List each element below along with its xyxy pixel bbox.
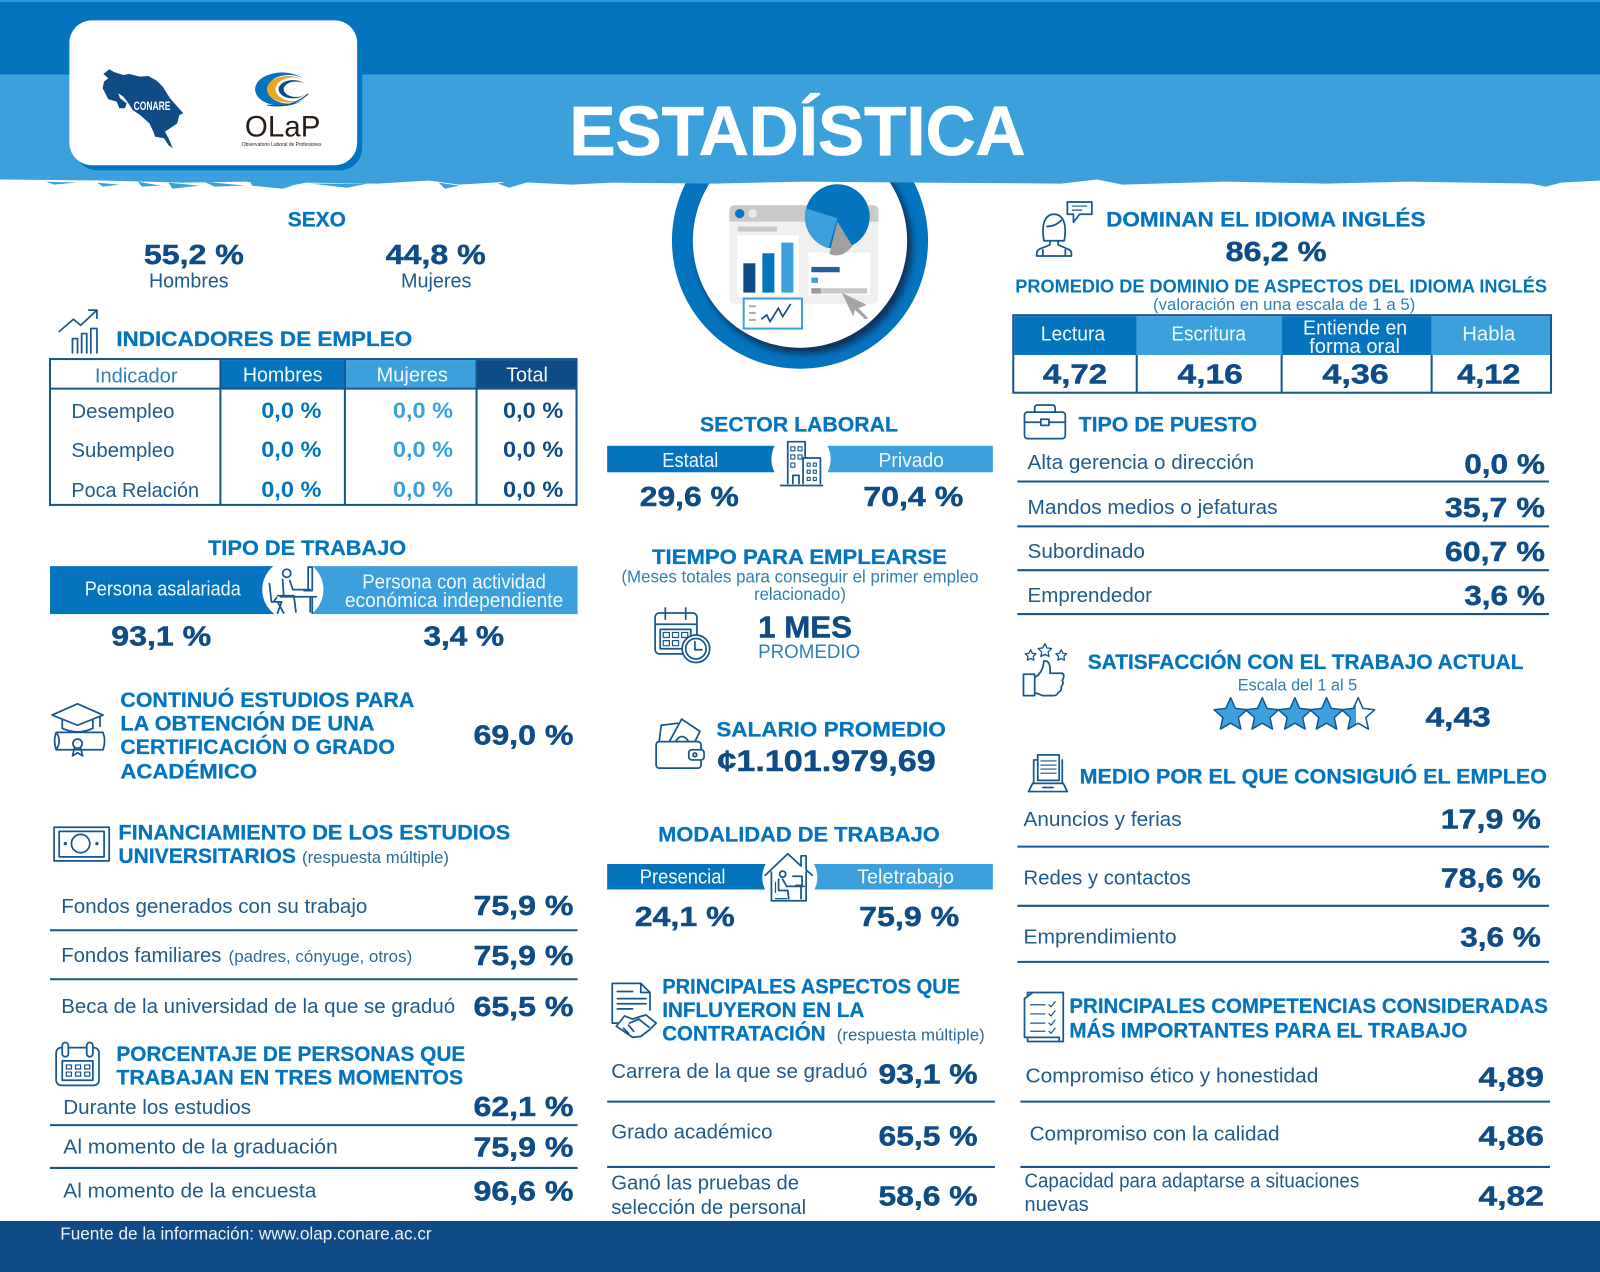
icon: thumbs up with stars <box>1023 644 1067 696</box>
panel: sector laboral <box>607 412 993 512</box>
row: emprendimiento: Emprendimiento <box>1023 927 1177 949</box>
heading: promedio de dominio: PROMEDIO DE DOMINIO DE ASPECTOS DEL IDIOMA INGLÉS <box>1015 276 1547 297</box>
row: grado académico: Grado académico <box>611 1121 772 1143</box>
heading: satisfacción: SATISFACCIÓN CON EL TRABAJO ACTUAL <box>1088 649 1523 674</box>
central illustration: dashboard in circle <box>672 113 928 369</box>
stat: mujeres <box>386 239 486 293</box>
icon: checklist <box>1024 993 1063 1041</box>
note: escala: (valoración en una escala de 1 a 5) <box>1153 296 1415 314</box>
table: indicadores: 0,0 % <box>261 398 321 423</box>
row: anuncios: 17,9 % <box>1441 803 1541 834</box>
table: indicadores: Mujeres <box>377 365 448 386</box>
row: graduación: 75,9 % <box>473 1132 573 1163</box>
bar: presencial y teletrabajo <box>607 850 993 905</box>
header band <box>0 0 1600 189</box>
footer <box>0 1221 1600 1272</box>
icon: home office <box>765 854 812 901</box>
row: compromiso ético: Compromiso ético y honestidad <box>1026 1065 1318 1087</box>
row: carrera <box>607 1058 995 1102</box>
stat: hombres: Hombres <box>149 271 229 293</box>
note: meses totales: relacionado) <box>754 584 846 604</box>
icon: rising chart <box>59 310 97 353</box>
row: subordinado: 60,7 % <box>1445 536 1545 567</box>
heading: tres momentos: TRABAJAN EN TRES MOMENTOS <box>116 1065 463 1089</box>
row: mandos medios: 35,7 % <box>1445 492 1545 523</box>
heading: aspectos de contratación: INFLUYERON EN LA <box>662 998 864 1022</box>
stat: dominan inglés: 86,2 % <box>1226 236 1327 267</box>
logo: CONARE map <box>103 69 183 148</box>
heading: continuó estudios: CERTIFICACIÓN O GRADO <box>120 734 395 759</box>
row: capacidad de adaptarse: nuevas <box>1024 1194 1089 1216</box>
panel: modalidad de trabajo <box>607 823 993 932</box>
heading: aspectos de contratación: (respuesta múltiple) <box>837 1026 985 1044</box>
bar: presencial y teletrabajo: Teletrabajo <box>857 866 954 888</box>
icon: briefcase <box>1024 405 1065 439</box>
row: beca: Beca de la universidad de la que se graduó <box>61 996 455 1018</box>
row: fondos familiares: Fondos familiares <box>61 945 221 967</box>
row: pruebas de selección: selección de personal <box>611 1197 806 1219</box>
panel: continuó estudios <box>52 687 573 783</box>
logo card <box>69 20 362 170</box>
row: capacidad de adaptarse: 4,82 <box>1479 1181 1544 1212</box>
logo: OLaP <box>242 72 322 148</box>
panel: financiamiento <box>50 821 578 1022</box>
row: fondos de trabajo: 75,9 % <box>473 890 573 921</box>
row: capacidad de adaptarse <box>1024 1170 1544 1216</box>
panel: tiempo para emplearse <box>621 545 979 663</box>
bar: estatal y privado <box>607 429 993 489</box>
table: indicadores: Hombres <box>243 365 322 386</box>
heading: sector laboral: SECTOR LABORAL <box>700 412 898 436</box>
heading: tres momentos <box>116 1042 465 1089</box>
heading: financiamiento <box>118 821 510 868</box>
row: compromiso calidad: Compromiso con la calidad <box>1030 1123 1280 1145</box>
row: carrera: 93,1 % <box>879 1058 978 1089</box>
note: meses totales: (Meses totales para conseguir el primer empleo <box>621 566 979 586</box>
panel: indicadores de empleo <box>50 310 577 505</box>
row: grado académico <box>607 1121 995 1167</box>
logo: CONARE map: CONARE <box>134 99 170 113</box>
heading: tres momentos: PORCENTAJE DE PERSONAS QUE <box>116 1042 465 1066</box>
stat: hombres: 55,2 % <box>144 239 244 270</box>
panel: satisfacción <box>1023 644 1523 732</box>
table: dominio de inglés: 4,12 <box>1457 359 1520 390</box>
icon: calendar <box>56 1042 99 1085</box>
row: emprendedor: Emprendedor <box>1028 585 1152 607</box>
table: indicadores: 0,0 % <box>261 437 321 462</box>
row: capacidad de adaptarse: Capacidad para adaptarse a situaciones <box>1024 1170 1359 1192</box>
table: indicadores: 0,0 % <box>393 477 453 502</box>
row: durante los estudios: 62,1 % <box>473 1091 573 1122</box>
heading: indicadores de empleo: INDICADORES DE EMPLEO <box>116 327 412 351</box>
table: dominio de inglés: 4,72 <box>1043 359 1107 390</box>
stat: 1 mes: 1 MES <box>758 611 852 645</box>
row: fondos de trabajo: Fondos generados con su trabajo <box>61 896 367 918</box>
heading: financiamiento: (respuesta múltiple) <box>302 849 449 867</box>
row: beca <box>61 991 573 1022</box>
heading: tipo de puesto: TIPO DE PUESTO <box>1079 412 1257 436</box>
row: mandos medios <box>1017 492 1549 526</box>
row: compromiso ético <box>1020 1061 1550 1102</box>
stat: teletrabajo: 75,9 % <box>859 901 959 932</box>
table: dominio de inglés: 4,36 <box>1322 359 1389 390</box>
table: dominio de inglés: 4,16 <box>1178 359 1243 390</box>
bar: estatal y privado: Estatal <box>662 450 718 472</box>
heading: financiamiento: FINANCIAMIENTO DE LOS ESTUDIOS <box>118 821 510 844</box>
panel: competencias <box>1020 993 1550 1216</box>
logo: OLaP: Observatorio Laboral de Profesiones <box>242 142 322 148</box>
heading: tipo de trabajo: TIPO DE TRABAJO <box>208 536 406 560</box>
row: emprendimiento <box>1017 922 1549 962</box>
footer: Fuente de la información: www.olap.conare.ac.cr <box>60 1223 432 1243</box>
table: indicadores: Subempleo <box>71 440 174 462</box>
row: graduación: Al momento de la graduación <box>63 1137 338 1159</box>
heading: competencias <box>1069 994 1548 1042</box>
row: pruebas de selección: Ganó las pruebas de <box>611 1172 799 1194</box>
title: ESTADÍSTICA <box>569 92 1026 170</box>
table: dominio de inglés <box>1013 315 1551 393</box>
row: fondos de trabajo <box>50 890 578 930</box>
row: emprendimiento: 3,6 % <box>1460 922 1541 953</box>
row: encuesta <box>63 1176 573 1207</box>
heading: competencias: MÁS IMPORTANTES PARA EL TRABAJO <box>1069 1017 1467 1042</box>
table: indicadores: 0,0 % <box>503 437 563 462</box>
stat: 1 mes <box>758 611 860 663</box>
table: indicadores: Indicador <box>95 366 178 388</box>
panel: tipo de puesto <box>1017 405 1549 614</box>
panel: idioma inglés <box>1013 202 1551 393</box>
stat: presencial: 24,1 % <box>635 901 735 932</box>
row: durante los estudios: Durante los estudios <box>63 1097 251 1119</box>
row: alta gerencia: 0,0 % <box>1464 448 1545 479</box>
table: indicadores: 0,0 % <box>503 477 563 502</box>
table: dominio de inglés: forma oral <box>1309 336 1400 358</box>
heading: continuó estudios <box>120 687 414 783</box>
icon: person at desk <box>269 567 316 613</box>
bar: asalariada e independiente: económica independiente <box>345 590 563 612</box>
table: indicadores: Total <box>506 365 548 386</box>
heading: salario promedio: SALARIO PROMEDIO <box>716 717 946 741</box>
row: compromiso calidad <box>1020 1121 1550 1167</box>
table: indicadores: Desempleo <box>71 401 174 423</box>
bar: estatal y privado: Privado <box>879 450 944 472</box>
row: grado académico: 65,5 % <box>879 1121 978 1152</box>
stat: independiente: 3,4 % <box>423 621 504 652</box>
stat: satisfacción: 4,43 <box>1426 701 1491 732</box>
row: fondos familiares: 75,9 % <box>473 940 573 971</box>
table: dominio de inglés: Escritura <box>1171 324 1247 346</box>
heading: sexo: SEXO <box>288 207 346 231</box>
icon: laptop with document <box>1029 755 1067 792</box>
heading: aspectos de contratación <box>662 975 985 1045</box>
bar: presencial y teletrabajo: Presencial <box>640 866 726 888</box>
row: beca: 65,5 % <box>473 991 573 1022</box>
bar: asalariada e independiente <box>50 559 578 620</box>
heading: continuó estudios: LA OBTENCIÓN DE UNA <box>120 710 374 735</box>
row: subordinado <box>1017 536 1549 570</box>
stat: 1 mes: PROMEDIO <box>758 641 860 663</box>
panel: tipo de trabajo <box>50 536 578 652</box>
row: encuesta: Al momento de la encuesta <box>63 1181 317 1203</box>
row: pruebas de selección: 58,6 % <box>879 1181 978 1212</box>
table: dominio de inglés: Lectura <box>1041 324 1106 346</box>
heading: dominan inglés: DOMINAN EL IDIOMA INGLÉS <box>1106 206 1426 231</box>
heading: aspectos de contratación: PRINCIPALES ASPECTOS QUE <box>662 975 960 999</box>
row: compromiso calidad: 4,86 <box>1479 1121 1544 1152</box>
row: encuesta: 96,6 % <box>473 1176 573 1207</box>
icon: buildings <box>781 442 822 486</box>
panel: sexo <box>144 207 486 293</box>
row: redes: 78,6 % <box>1441 862 1541 893</box>
icon: graduation cap and diploma <box>52 704 105 756</box>
table: indicadores: 0,0 % <box>503 398 563 423</box>
stat: hombres <box>144 239 244 293</box>
heading: medio de empleo: MEDIO POR EL QUE CONSIGUIÓ EL EMPLEO <box>1080 763 1547 788</box>
heading: continuó estudios: ACADÉMICO <box>120 758 257 783</box>
row: emprendedor: 3,6 % <box>1464 580 1545 611</box>
panel: salario promedio <box>656 717 946 778</box>
note: meses totales <box>621 566 979 604</box>
stat: salario: ¢1.101.979,69 <box>717 745 936 778</box>
rating stars <box>1214 698 1375 729</box>
row: fondos familiares: (padres, cónyuge, otros) <box>229 948 412 966</box>
icon: woman speaking <box>1037 202 1092 256</box>
heading: continuó estudios: CONTINUÓ ESTUDIOS PARA <box>120 687 414 712</box>
table: indicadores: 0,0 % <box>261 477 321 502</box>
table: indicadores: 0,0 % <box>393 398 453 423</box>
bar: asalariada e independiente: Persona asalariada <box>85 579 241 601</box>
row: redes: Redes y contactos <box>1023 867 1191 889</box>
heading: tiempo para emplearse: TIEMPO PARA EMPLEARSE <box>652 545 947 569</box>
row: graduación <box>50 1132 578 1168</box>
row: carrera: Carrera de la que se graduó <box>611 1061 867 1083</box>
icon: contract and handshake <box>612 983 656 1037</box>
panel: aspectos de contratación <box>607 975 995 1219</box>
heading: financiamiento: UNIVERSITARIOS <box>118 844 296 868</box>
stat: estatal: 29,6 % <box>640 481 739 512</box>
table: dominio de inglés: Entiende en <box>1303 318 1407 340</box>
logo: OLaP: OLaP <box>245 111 320 144</box>
icon: wallet <box>656 719 704 768</box>
row: mandos medios: Mandos medios o jefaturas <box>1028 497 1278 519</box>
panel: tres momentos <box>50 1042 578 1207</box>
icon: calendar and clock <box>655 608 710 663</box>
row: alta gerencia <box>1017 448 1549 481</box>
row: redes <box>1017 862 1549 906</box>
stat: continuó estudios: 69,0 % <box>473 720 573 751</box>
row: durante los estudios <box>50 1091 578 1125</box>
note: escala del 1 al 5: Escala del 1 al 5 <box>1238 677 1357 695</box>
stat: mujeres: 44,8 % <box>386 239 486 270</box>
table: indicadores <box>50 359 577 505</box>
table: dominio de inglés: Habla <box>1462 324 1516 346</box>
panel: medio de empleo <box>1017 755 1549 962</box>
table: indicadores: 0,0 % <box>393 437 453 462</box>
row: anuncios: Anuncios y ferias <box>1023 809 1182 831</box>
row: compromiso ético: 4,89 <box>1479 1061 1544 1092</box>
heading: modalidad de trabajo: MODALIDAD DE TRABAJO <box>658 823 940 847</box>
row: anuncios <box>1017 803 1549 847</box>
stat: asalariada: 93,1 % <box>111 621 211 652</box>
row: pruebas de selección <box>611 1172 978 1219</box>
table: indicadores: Poca Relación <box>71 480 199 502</box>
row: alta gerencia: Alta gerencia o dirección <box>1028 452 1254 474</box>
bar: asalariada e independiente: Persona con actividad <box>362 572 546 594</box>
row: fondos familiares <box>50 940 578 979</box>
stat: mujeres: Mujeres <box>401 271 471 293</box>
row: emprendedor <box>1017 580 1549 614</box>
stat: privado: 70,4 % <box>863 481 963 512</box>
heading: competencias: PRINCIPALES COMPETENCIAS CONSIDERADAS <box>1069 994 1548 1018</box>
row: subordinado: Subordinado <box>1028 541 1145 563</box>
icon: banknote <box>54 827 109 861</box>
heading: aspectos de contratación: CONTRATACIÓN <box>662 1020 826 1045</box>
